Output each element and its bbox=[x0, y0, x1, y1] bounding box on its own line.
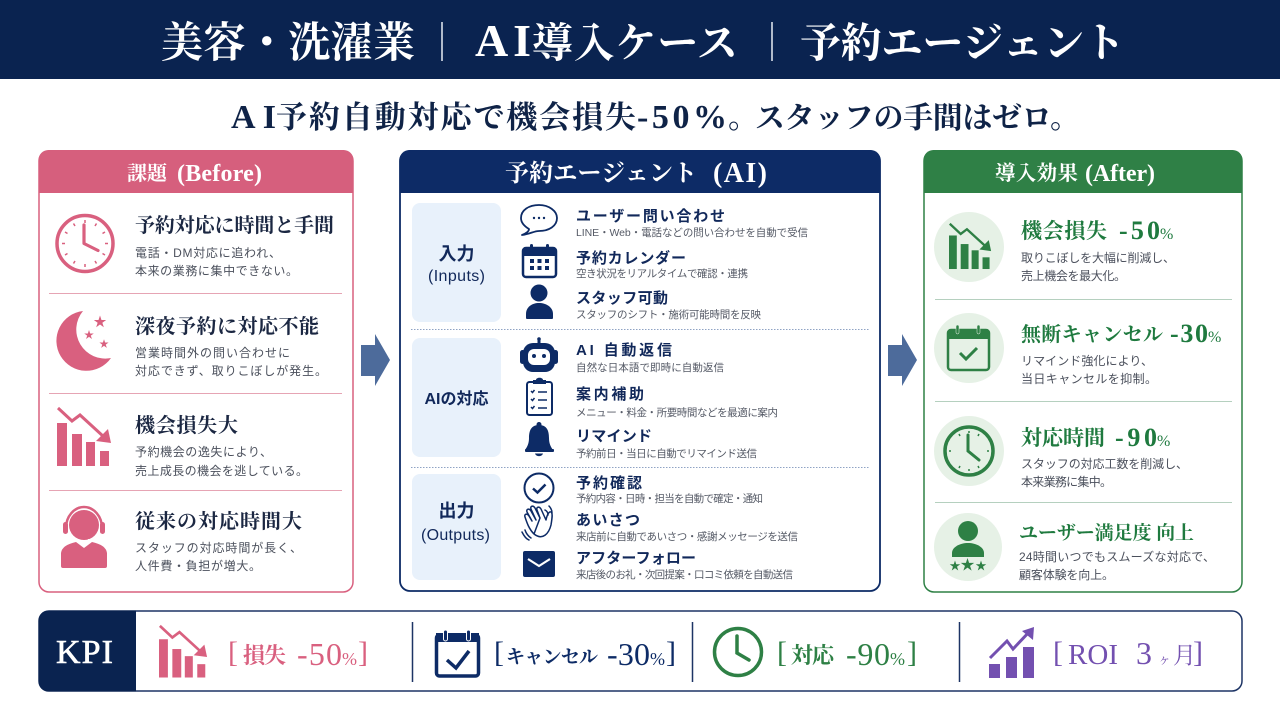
effect 2 text: リマインド強化により、 bbox=[1021, 354, 1153, 368]
title banner: 予約エージェント bbox=[800, 20, 1125, 66]
confirm text: 予約内容・日時・担当を自動で確定・通知 bbox=[576, 492, 763, 505]
KPI: cancel: キャンセル bbox=[506, 647, 598, 668]
inquiry text: LINE・Web・電話などの問い合わせを自動で受信 bbox=[576, 226, 808, 239]
effect 2 text bbox=[1021, 319, 1221, 386]
calendar text: 予約カレンダー bbox=[576, 249, 686, 267]
inquiry text bbox=[576, 208, 808, 239]
effect 3 text: 本来業務に集中。 bbox=[1021, 474, 1112, 489]
follow-up text: アフターフォロー bbox=[576, 550, 696, 567]
effect 1 text: 取りこぼしを大幅に削減し、 bbox=[1021, 250, 1175, 265]
title banner: 美容・洗濯業 bbox=[161, 20, 415, 67]
before header: (Before) bbox=[177, 161, 262, 187]
auto reply text: 自然な日本語で即時に自動返信 bbox=[576, 361, 724, 374]
problem 1 text: 電話・DM対応に追われ、 bbox=[135, 245, 281, 260]
icon: calendar bbox=[523, 244, 556, 277]
KPI: ROI: ] bbox=[1193, 636, 1203, 669]
effect 3 text: 対応時間 bbox=[1021, 426, 1105, 450]
title banner bbox=[0, 0, 1280, 79]
KPI: response time: ] bbox=[907, 636, 917, 669]
effect 3 text: % bbox=[1157, 433, 1170, 450]
title banner: AI bbox=[475, 15, 531, 66]
effect 4 text: ユーザー満足度 向上 bbox=[1019, 521, 1194, 544]
icon: clock badge bbox=[934, 416, 1004, 486]
AI response label bbox=[412, 338, 501, 457]
KPI: response time bbox=[714, 628, 917, 676]
KPI: ROI bbox=[989, 627, 1203, 678]
effect 4 text: 顧客体験を向上。 bbox=[1019, 567, 1114, 582]
icon: chat bubble bbox=[521, 205, 557, 235]
after header: (After) bbox=[1085, 161, 1155, 187]
inputs label bbox=[412, 203, 501, 322]
KPI: response time: 対応 bbox=[791, 643, 837, 668]
icon: clock bbox=[57, 216, 113, 272]
KPI: cancel: % bbox=[650, 649, 665, 669]
outputs label bbox=[412, 474, 501, 580]
effect 3 text bbox=[1021, 423, 1188, 489]
guidance text: メニュー・料金・所要時間などを最適に案内 bbox=[576, 406, 778, 419]
problem 2 text: 営業時間外の問い合わせに bbox=[135, 346, 290, 360]
subtitle: -50% bbox=[637, 99, 727, 136]
calendar text: 空き状況をリアルタイムで確認・連携 bbox=[576, 267, 748, 280]
outputs label: (Outputs) bbox=[421, 527, 490, 544]
icon: staff person bbox=[526, 284, 553, 319]
KPI: ROI: 月 bbox=[1173, 643, 1196, 668]
KPI: loss: [ bbox=[228, 636, 238, 669]
icon: falling chart bbox=[57, 408, 111, 466]
arrow: agent to after bbox=[888, 334, 917, 386]
reminder text: リマインド bbox=[576, 428, 652, 445]
KPI: loss: -50 bbox=[297, 636, 342, 672]
after header bbox=[924, 150, 1242, 193]
subtitle bbox=[231, 99, 1080, 136]
effect 2 text: % bbox=[1208, 329, 1221, 346]
KPI: cancel: ] bbox=[666, 636, 676, 669]
KPI: response time: [ bbox=[777, 636, 787, 669]
problem 4 text bbox=[135, 510, 302, 573]
effect 1 text: % bbox=[1160, 226, 1173, 243]
arrow: before to agent bbox=[361, 334, 390, 386]
problem 2 text: 深夜予約に対応不能 bbox=[135, 315, 319, 338]
icon: envelope bbox=[523, 551, 555, 577]
KPI label: KPI bbox=[56, 634, 113, 671]
panel: before bbox=[38, 150, 354, 592]
effect 2 text: 無断キャンセル bbox=[1021, 322, 1163, 346]
before header bbox=[38, 150, 354, 193]
subtitle: AI bbox=[231, 99, 276, 136]
KPI: cancel: [ bbox=[494, 636, 504, 669]
guidance text bbox=[576, 385, 778, 419]
icon: falling chart badge bbox=[934, 212, 1004, 282]
reminder text bbox=[576, 428, 758, 460]
icon: operator with headset bbox=[61, 507, 107, 568]
inquiry text: ユーザー問い合わせ bbox=[576, 208, 725, 225]
confirm text bbox=[576, 474, 763, 505]
auto reply text bbox=[576, 341, 724, 374]
outputs label: 出力 bbox=[438, 501, 474, 521]
staff text: スタッフ可動 bbox=[576, 290, 668, 307]
KPI label bbox=[38, 610, 136, 692]
problem 2 text bbox=[135, 315, 327, 378]
agent header bbox=[400, 150, 880, 193]
problem 1 text: 予約対応に時間と手間 bbox=[135, 214, 334, 237]
panel: after bbox=[924, 150, 1242, 592]
effect 1 text bbox=[1021, 216, 1175, 283]
follow-up text bbox=[576, 550, 794, 581]
effect 1 text: 売上機会を最大化。 bbox=[1021, 268, 1126, 283]
KPI: ROI: ヶ bbox=[1158, 652, 1171, 667]
icon: moon and stars bbox=[56, 311, 111, 371]
problem 3 text: 売上成長の機会を逃している。 bbox=[135, 463, 308, 478]
effect 2 text: -30 bbox=[1170, 319, 1208, 348]
title banner: 導入ケース bbox=[532, 20, 738, 66]
effect 1 text: -50 bbox=[1119, 216, 1160, 245]
problem 4 text: 従来の対応時間大 bbox=[135, 510, 302, 533]
KPI: cancel: -30 bbox=[607, 636, 650, 672]
staff text bbox=[576, 290, 762, 321]
icon: calendar check badge bbox=[934, 313, 1004, 383]
calendar text bbox=[576, 249, 748, 280]
agent header: (AI) bbox=[713, 158, 767, 189]
greeting text: あいさつ bbox=[576, 512, 640, 529]
KPI: ROI: 3 bbox=[1136, 635, 1152, 671]
problem 1 text bbox=[135, 214, 334, 278]
after header: 導入効果 bbox=[995, 161, 1078, 185]
inputs label: 入力 bbox=[438, 244, 474, 264]
KPI: ROI: ROI bbox=[1068, 639, 1118, 671]
KPI: loss bbox=[159, 626, 368, 678]
effect 3 text: -90 bbox=[1115, 423, 1157, 452]
KPI: ROI: [ bbox=[1053, 636, 1063, 669]
effect 4 text bbox=[1019, 521, 1215, 582]
icon: bell bbox=[525, 422, 554, 456]
icon: satisfied user badge bbox=[934, 513, 1002, 581]
subtitle: 。 bbox=[728, 100, 759, 135]
auto reply text: AI 自動返信 bbox=[576, 341, 672, 359]
inputs label: (Inputs) bbox=[428, 268, 485, 285]
agent header: 予約エージェント bbox=[505, 160, 697, 187]
problem 1 text: 本来の業務に集中できない。 bbox=[135, 263, 298, 278]
KPI: loss: % bbox=[342, 649, 357, 669]
KPI: response time: -90 bbox=[846, 636, 890, 672]
subtitle: 予約自動対応で機会損失 bbox=[276, 100, 636, 135]
effect 3 text: スタッフの対応工数を削減し、 bbox=[1021, 456, 1188, 471]
reminder text: 予約前日・当日に自動でリマインド送信 bbox=[576, 447, 758, 460]
AI response label: AIの対応 bbox=[424, 390, 489, 408]
KPI: cancel bbox=[436, 630, 676, 676]
KPI: loss: ] bbox=[358, 636, 368, 669]
problem 4 text: スタッフの対応時間が長く、 bbox=[135, 540, 302, 555]
confirm text: 予約確認 bbox=[576, 474, 642, 492]
problem 4 text: 人件費・負担が増大。 bbox=[135, 558, 261, 573]
greeting text bbox=[576, 512, 798, 543]
greeting text: 来店前に自動であいさつ・感謝メッセージを送信 bbox=[576, 530, 798, 543]
KPI: response time: % bbox=[890, 649, 905, 669]
problem 3 text: 機会損失大 bbox=[135, 413, 238, 437]
subtitle: スタッフの手間はゼロ。 bbox=[755, 102, 1080, 135]
icon: clipboard bbox=[527, 378, 552, 415]
staff text: スタッフのシフト・施術可能時間を反映 bbox=[576, 308, 762, 321]
before header: 課題 bbox=[127, 162, 169, 185]
problem 3 text: 予約機会の逸失により、 bbox=[135, 444, 272, 459]
effect 1 text: 機会損失 bbox=[1021, 219, 1107, 243]
problem 2 text: 対応できず、取りこぼしが発生。 bbox=[135, 363, 327, 378]
effect 4 text: 24時間いつでもスムーズな対応で、 bbox=[1019, 549, 1215, 564]
problem 3 text bbox=[135, 413, 308, 478]
panel: KPI bar bbox=[38, 610, 1242, 692]
follow-up text: 来店後のお礼・次回提案・口コミ依頼を自動送信 bbox=[576, 568, 794, 581]
KPI: loss: 損失 bbox=[243, 643, 286, 668]
icon: waving hand bbox=[522, 506, 552, 540]
icon: robot bbox=[520, 337, 558, 372]
panel: AI agent bbox=[400, 150, 880, 591]
icon: check circle bbox=[524, 474, 554, 502]
guidance text: 案内補助 bbox=[576, 385, 644, 403]
effect 2 text: 当日キャンセルを抑制。 bbox=[1021, 372, 1157, 386]
